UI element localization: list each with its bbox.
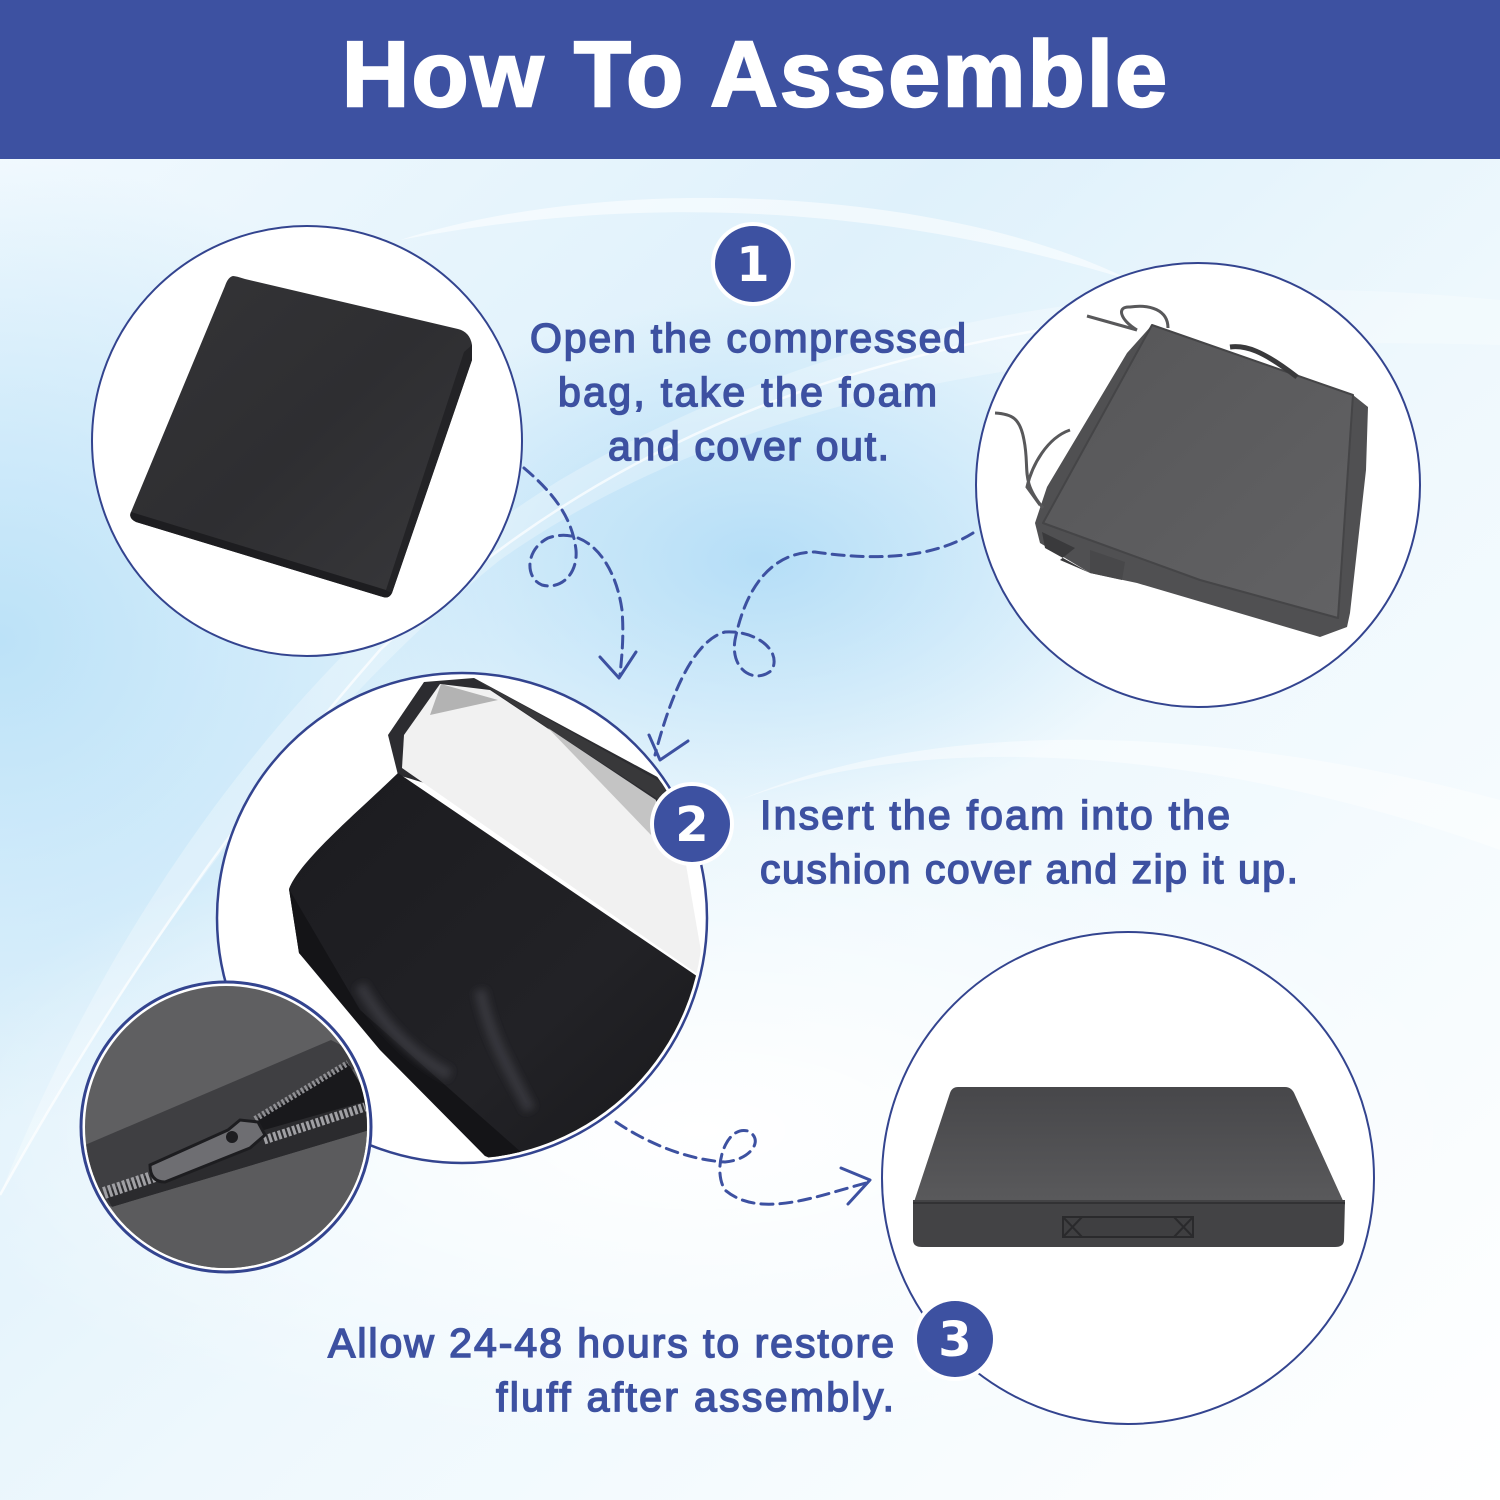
badge 3	[913, 1297, 997, 1381]
photo: compressed foam	[92, 226, 522, 656]
photo: foam into cover	[217, 673, 720, 1180]
step 2 text	[760, 792, 1298, 892]
badge 2: 2	[675, 797, 709, 853]
badge 3: 3	[938, 1312, 972, 1368]
step 3 text: fluff after assembly.	[496, 1374, 894, 1420]
badge 1: 1	[736, 237, 770, 293]
arrow: step 2 to step 3	[616, 1122, 870, 1204]
cover body	[1035, 325, 1368, 637]
badge 2	[650, 782, 734, 866]
step 2 text: cushion cover and zip it up.	[760, 846, 1298, 892]
arrow: cover to step 2	[649, 533, 973, 760]
cover top face	[1043, 325, 1353, 618]
step 1 text: bag, take the foam	[558, 369, 937, 415]
title: How To Assemble	[342, 22, 1167, 126]
step 1 text	[530, 315, 966, 469]
photo: finished cushion	[882, 932, 1374, 1424]
photo: cushion cover	[976, 263, 1420, 707]
step 3 text	[328, 1320, 894, 1420]
step 1 text: and cover out.	[608, 423, 889, 469]
step 2 text: Insert the foam into the	[760, 792, 1230, 838]
arrow: step 1 to step 2	[524, 468, 636, 678]
photo: zipper close-up	[80, 980, 380, 1290]
step 1 text: Open the compressed	[530, 315, 966, 361]
header band	[0, 0, 1500, 159]
step 3 text: Allow 24-48 hours to restore	[328, 1320, 894, 1366]
straps	[995, 306, 1168, 508]
badge 1	[711, 222, 795, 306]
